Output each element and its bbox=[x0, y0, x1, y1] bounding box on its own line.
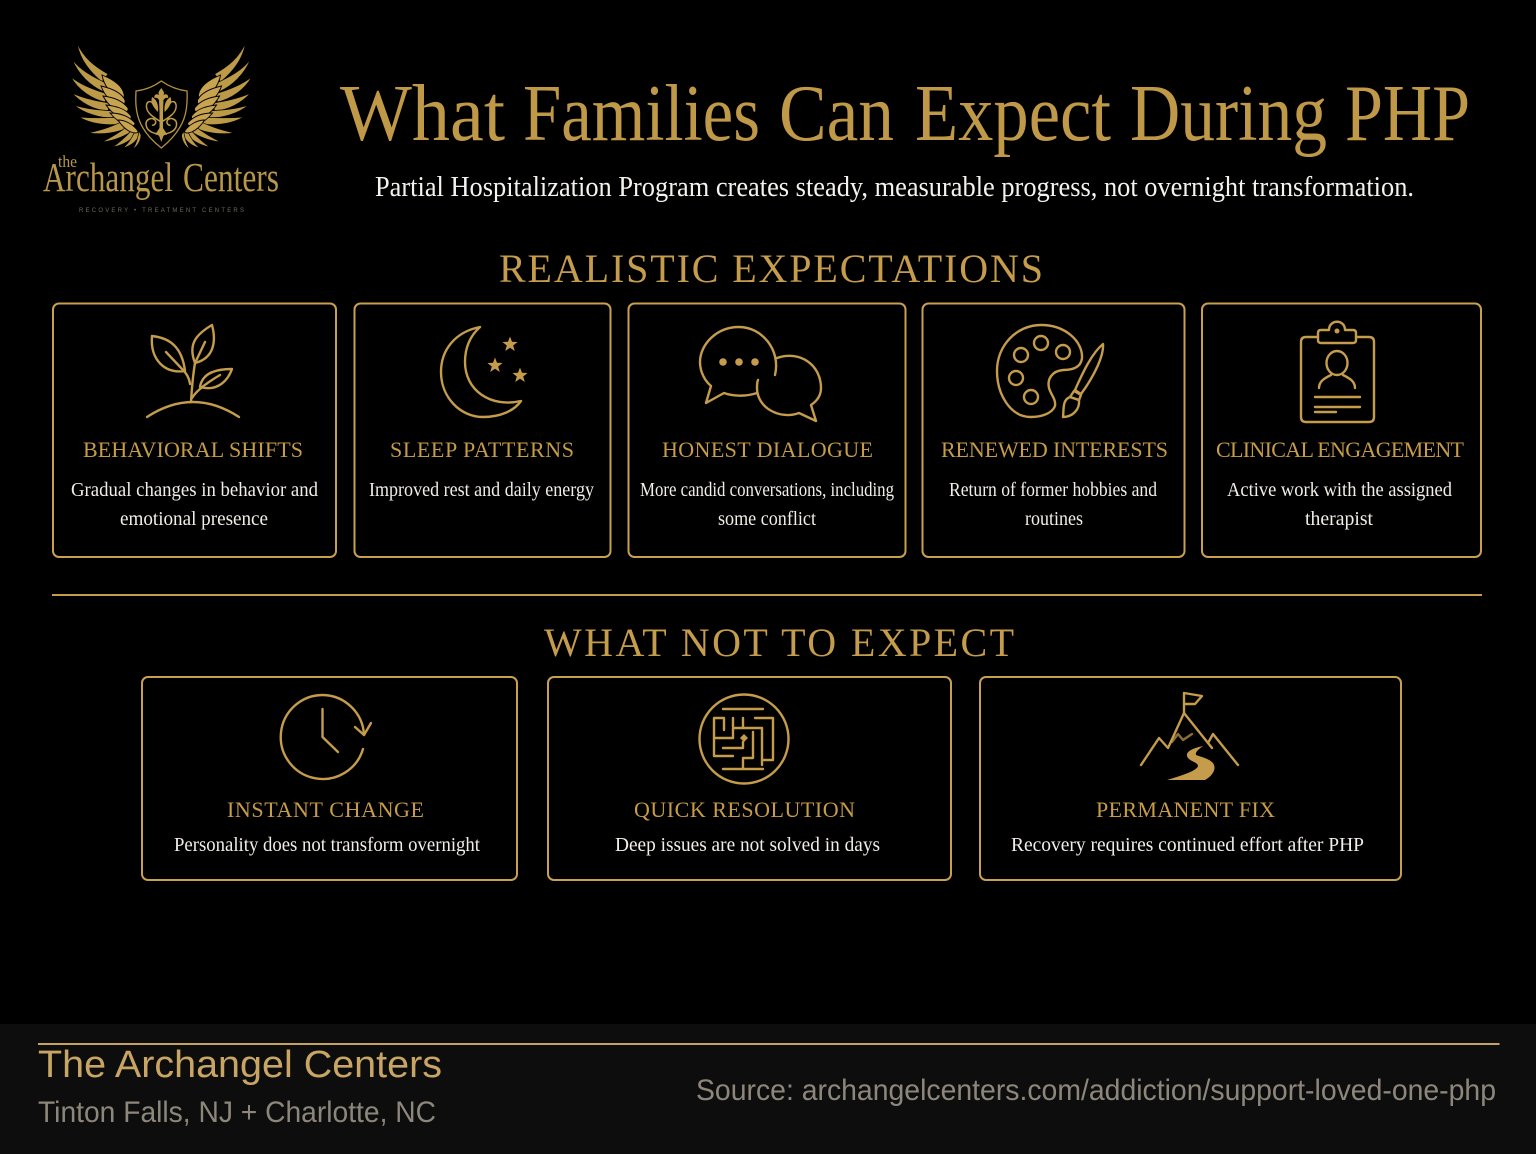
subtitle: Partial Hospitalization Program creates steady, measurable progress, not overnight transformation. bbox=[375, 172, 1414, 203]
card title: SLEEP PATTERNS bbox=[390, 437, 574, 462]
card text: therapist bbox=[1305, 508, 1373, 530]
footer bbox=[0, 1024, 1536, 1154]
icon: sprout bbox=[147, 325, 239, 417]
panel: renewed interests bbox=[922, 304, 1184, 557]
heading: what not to expect: WHAT NOT TO EXPECT bbox=[544, 620, 1014, 665]
card title: HONEST DIALOGUE bbox=[662, 437, 873, 462]
heading: realistic expectations: REALISTIC EXPECTATIONS bbox=[499, 246, 1043, 291]
icon: mountain with flag bbox=[1141, 693, 1238, 780]
card text: Active work with the assigned bbox=[1227, 479, 1452, 501]
icon: right wing coverts bbox=[185, 75, 222, 133]
card title: CLINICAL ENGAGEMENT bbox=[1216, 437, 1465, 462]
card title: PERMANENT FIX bbox=[1096, 797, 1275, 822]
panel: clinical engagement bbox=[1202, 304, 1481, 557]
title: Can bbox=[779, 70, 894, 158]
card text: More candid conversations, including bbox=[640, 479, 894, 501]
title: During bbox=[1130, 70, 1327, 158]
logo: The Archangel Centers bbox=[43, 43, 279, 214]
logo wordmark: Centers bbox=[183, 154, 279, 200]
card text bbox=[1227, 479, 1452, 530]
card title: INSTANT CHANGE bbox=[227, 797, 424, 822]
panel: quick resolution bbox=[548, 677, 951, 880]
card title: RENEWED INTERESTS bbox=[941, 437, 1168, 462]
title: PHP bbox=[1345, 70, 1470, 158]
card text: Improved rest and daily energy bbox=[369, 479, 595, 501]
card title: BEHAVIORAL SHIFTS bbox=[83, 437, 303, 462]
card title: QUICK RESOLUTION bbox=[634, 797, 855, 822]
title: Expect bbox=[915, 70, 1111, 158]
icon: speech bubbles bbox=[700, 327, 821, 421]
icon: moon and stars bbox=[441, 327, 528, 417]
icon: palette and brush bbox=[997, 325, 1103, 417]
card text: Personality does not transform overnight bbox=[174, 834, 480, 856]
panel: sleep patterns bbox=[354, 304, 610, 557]
title: Families bbox=[523, 70, 760, 158]
panel: instant change bbox=[142, 677, 517, 880]
title bbox=[340, 70, 1470, 158]
card text: routines bbox=[1025, 508, 1083, 530]
panel: permanent fix bbox=[980, 677, 1401, 880]
card text: some conflict bbox=[718, 508, 816, 530]
icon: left wing coverts bbox=[101, 75, 138, 133]
icon: maze bbox=[700, 694, 788, 784]
logo wordmark: the bbox=[58, 152, 77, 171]
card text: Recovery requires continued effort after PHP bbox=[1011, 834, 1364, 856]
footer organisation name: The Archangel Centers bbox=[38, 1044, 442, 1086]
icon: right wing bbox=[182, 43, 252, 149]
title: What bbox=[340, 70, 505, 158]
card text: emotional presence bbox=[120, 508, 268, 530]
card text: Gradual changes in behavior and bbox=[71, 479, 318, 501]
panel: honest dialogue bbox=[628, 304, 906, 557]
logo tagline: RECOVERY • TREATMENT CENTERS bbox=[79, 208, 244, 214]
icon: shield bbox=[136, 81, 187, 148]
card text: Deep issues are not solved in days bbox=[615, 834, 880, 856]
logo wordmark: Archangel bbox=[43, 154, 173, 200]
footer locations: Tinton Falls, NJ + Charlotte, NC bbox=[38, 1096, 436, 1129]
card text bbox=[949, 479, 1157, 530]
footer source: Source: archangelcenters.com/addiction/support-loved-one-php bbox=[696, 1074, 1496, 1107]
card text bbox=[71, 479, 318, 530]
icon: left wing bbox=[71, 43, 141, 149]
logo wordmark bbox=[43, 152, 279, 200]
card text: Return of former hobbies and bbox=[949, 479, 1157, 501]
icon: clipboard with person bbox=[1301, 322, 1374, 422]
icon: clock with arrow bbox=[281, 695, 371, 779]
card text bbox=[640, 479, 894, 530]
panel: behavioral shifts bbox=[53, 304, 336, 557]
